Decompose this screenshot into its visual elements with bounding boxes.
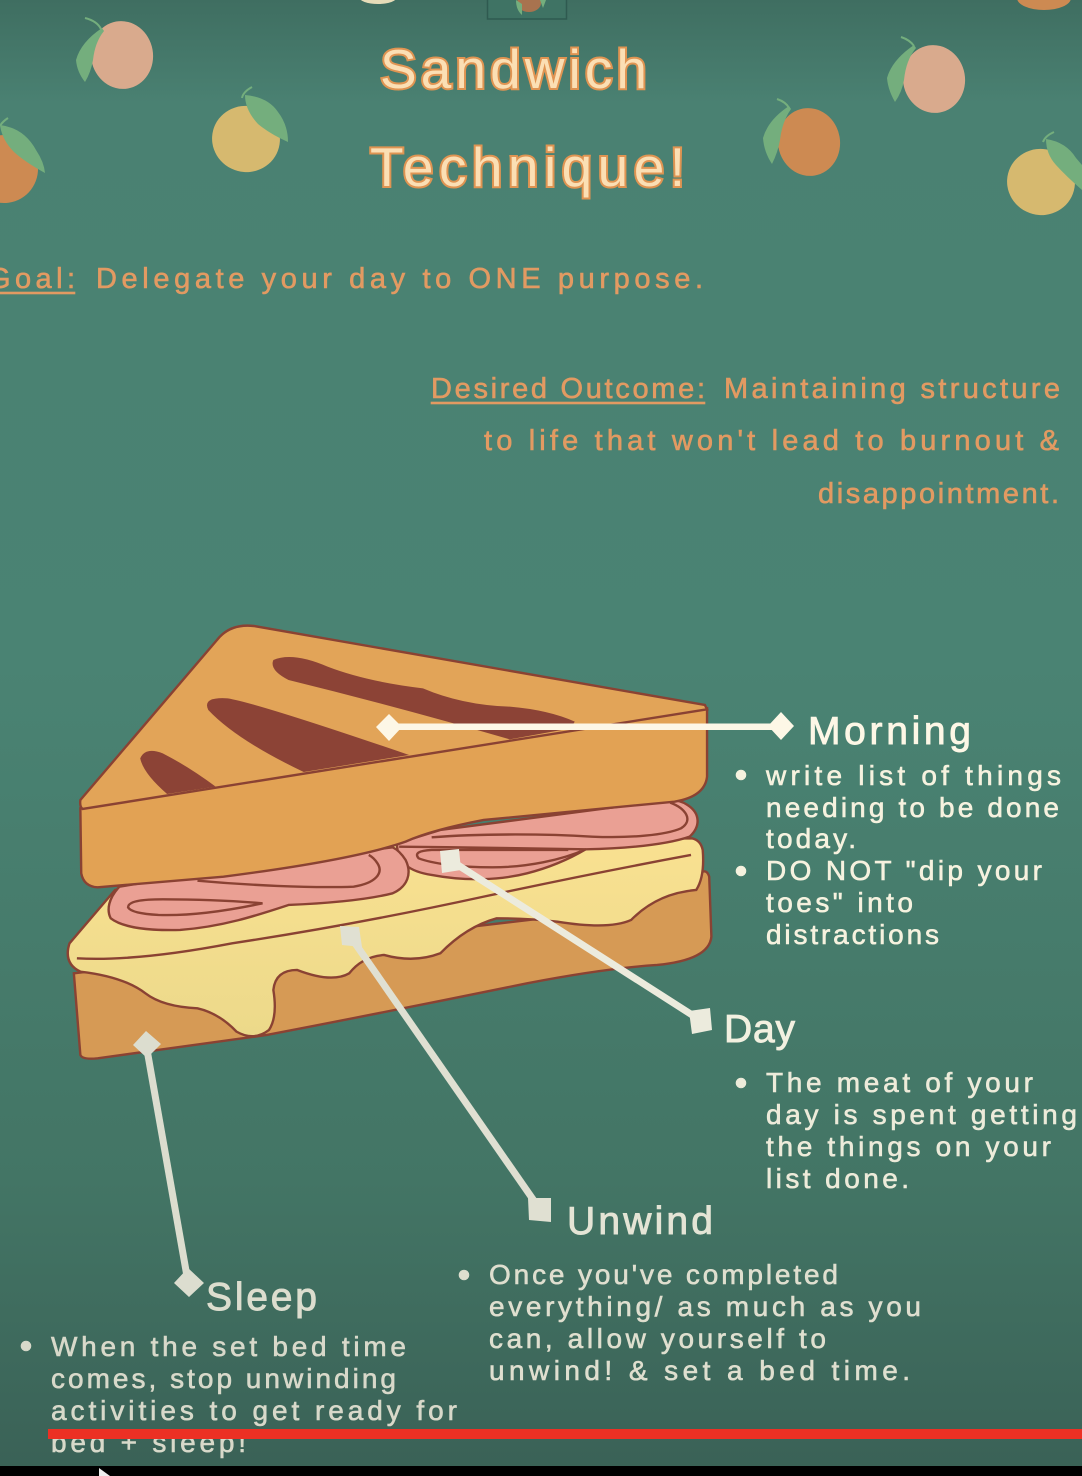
- morning heading: Morning: [808, 710, 971, 753]
- arrow: sleep leader: [133, 1031, 204, 1297]
- icon: orange fruit top right: [1017, 0, 1071, 10]
- icon: yellow peach right: [1000, 132, 1082, 223]
- icon: pink peach left: [76, 16, 158, 94]
- sleep bullets: comes, stop unwinding: [51, 1363, 396, 1394]
- grill marks: [140, 657, 575, 794]
- morning bullets: [736, 760, 1061, 950]
- title: Technique!: [370, 136, 685, 198]
- cheese: [68, 838, 703, 1036]
- sleep heading: Sleep: [206, 1276, 317, 1319]
- morning bullets: DO NOT "dip your: [766, 855, 1042, 886]
- morning bullets: toes" into: [766, 887, 913, 918]
- desired outcome text: [431, 373, 1060, 510]
- icon: orange peach right: [763, 99, 845, 181]
- illustration: sandwich: [68, 626, 711, 1059]
- unwind bullets: can, allow yourself to: [489, 1323, 826, 1354]
- morning bullets: needing to be done: [766, 792, 1059, 823]
- top bread crust face: [80, 708, 707, 887]
- icon: pink peach right: [887, 37, 970, 118]
- day bullets: list done.: [766, 1163, 909, 1194]
- unwind bullets: everything/ as much as you: [489, 1291, 921, 1322]
- title: [370, 38, 685, 198]
- day bullets: [736, 1067, 1077, 1194]
- desired outcome text: Desired Outcome:: [431, 373, 705, 405]
- day bullets: the things on your: [766, 1131, 1051, 1162]
- desired outcome text: Maintaining structure: [724, 373, 1060, 405]
- unwind heading: Unwind: [567, 1200, 713, 1243]
- icon: cream fruit top: [359, 0, 397, 4]
- sleep bullets: [21, 1331, 457, 1458]
- day heading: Day: [724, 1008, 796, 1051]
- sleep bullets: When the set bed time: [51, 1331, 406, 1362]
- fruit decorations: [0, 0, 1082, 223]
- title: Sandwich: [380, 38, 647, 100]
- arrow: unwind leader: [340, 926, 551, 1222]
- icon: orange peach left edge: [0, 118, 46, 211]
- day bullets: The meat of your: [766, 1067, 1033, 1098]
- sleep bullets: bed + sleep!: [51, 1427, 246, 1458]
- ham left slice: [109, 847, 409, 930]
- desired outcome text: disappointment.: [818, 478, 1059, 510]
- cheese edge line: [77, 855, 691, 959]
- unwind bullets: unwind! & set a bed time.: [489, 1355, 910, 1386]
- morning bullets: distractions: [766, 919, 939, 950]
- morning bullets: today.: [766, 823, 856, 854]
- icon: cropped thumbnail at top: [488, 0, 566, 19]
- arrow: day leader: [440, 849, 712, 1034]
- icon: yellow peach: [205, 87, 288, 180]
- bottom bread: [74, 871, 711, 1059]
- day bullets: day is spent getting: [766, 1099, 1077, 1130]
- ham right slice: [397, 800, 698, 879]
- arrow: morning leader: [376, 712, 794, 741]
- player bottom strip: [0, 1466, 1082, 1476]
- unwind bullets: [459, 1259, 921, 1386]
- morning bullets: write list of things: [765, 760, 1061, 791]
- unwind bullets: Once you've completed: [489, 1259, 838, 1290]
- progress bar: [48, 1429, 1082, 1439]
- desired outcome text: to life that won't lead to burnout &: [484, 425, 1059, 457]
- goal text: Delegate your day to ONE purpose.: [96, 263, 703, 295]
- top bread upper face: [80, 626, 707, 809]
- sleep bullets: activities to get ready for: [51, 1395, 457, 1426]
